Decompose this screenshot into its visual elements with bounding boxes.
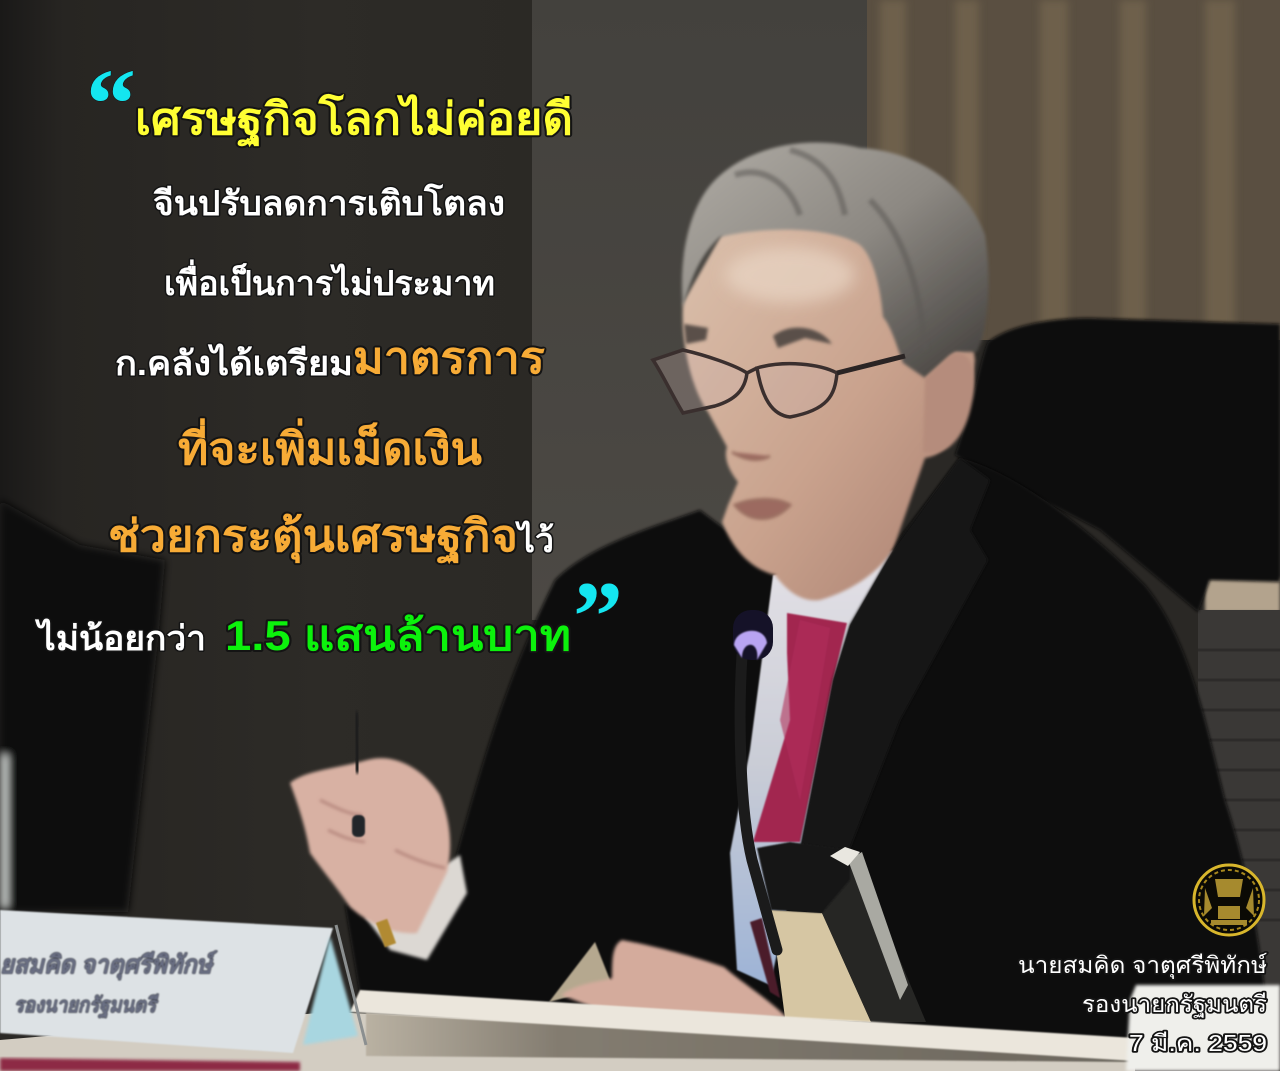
line: finance ministry measures: ก.คลังได้เตรียม [115, 343, 353, 383]
hand holding pen [290, 758, 450, 947]
lapel [800, 458, 990, 950]
name plate [0, 910, 366, 1053]
line: finance ministry measures: มาตรการ [353, 334, 545, 383]
attribution text [1018, 952, 1268, 1056]
speaker name: นายสมคิด จาตุศรีพิทักษ์ [1018, 952, 1268, 979]
line: amount [35, 612, 571, 659]
line: stimulate economy: ช่วยกระตุ้นเศรษฐกิจ [108, 512, 518, 564]
face and neck [683, 200, 975, 600]
speaker title: รองนายกรัฐมนตรี [1082, 991, 1267, 1018]
hair [682, 143, 988, 378]
conference table [0, 985, 1280, 1071]
second hand on table [561, 940, 787, 1018]
emblem: government seal [1194, 865, 1264, 935]
suit jacket [345, 458, 1270, 1040]
nose shadow and mouth [732, 452, 790, 519]
headline: เศรษฐกิจโลกไม่ค่อยดี [135, 92, 573, 147]
pen [356, 715, 358, 770]
line: amount: ไม่น้อยกว่า [35, 618, 206, 658]
person seated left edge [0, 500, 165, 912]
date: 7 มี.ค. 2559 [1129, 1030, 1267, 1056]
shirt cuff [365, 855, 467, 960]
man in suit [290, 143, 1270, 1040]
beige gap left of hand [549, 942, 612, 1002]
hair strands [735, 150, 925, 350]
eyeglasses [653, 350, 905, 417]
microphone stem [740, 655, 777, 950]
microphone [733, 610, 926, 1022]
line: finance ministry measures [115, 334, 545, 383]
line: amount: 1.5 แสนล้านบาท [225, 612, 571, 659]
shirt front [730, 550, 893, 985]
microphone base [771, 910, 871, 1022]
line: not careless: เพื่อเป็นการไม่ประมาท [164, 259, 495, 303]
necktie [750, 613, 847, 998]
microphone head [733, 610, 773, 660]
closing quotation mark: ” [573, 561, 623, 672]
ear [923, 353, 974, 453]
opening quotation mark: “ [86, 48, 136, 159]
forehead highlight [725, 247, 855, 303]
eyebrows [684, 324, 832, 348]
line: stimulate economy: ไว้ [515, 520, 554, 560]
quote text block [35, 48, 623, 672]
line: China growth: จีนปรับลดการเติบโตลง [153, 183, 505, 223]
line: add money: ที่จะเพิ่มเม็ดเงิน [178, 418, 482, 474]
name plate text: ยสมคิด จาตุศรีพิทักษ์ [0, 950, 218, 980]
name plate text: รองนายกรัฐมนตรี [14, 993, 160, 1019]
name plate text [0, 950, 218, 1019]
office chair [955, 318, 1280, 612]
